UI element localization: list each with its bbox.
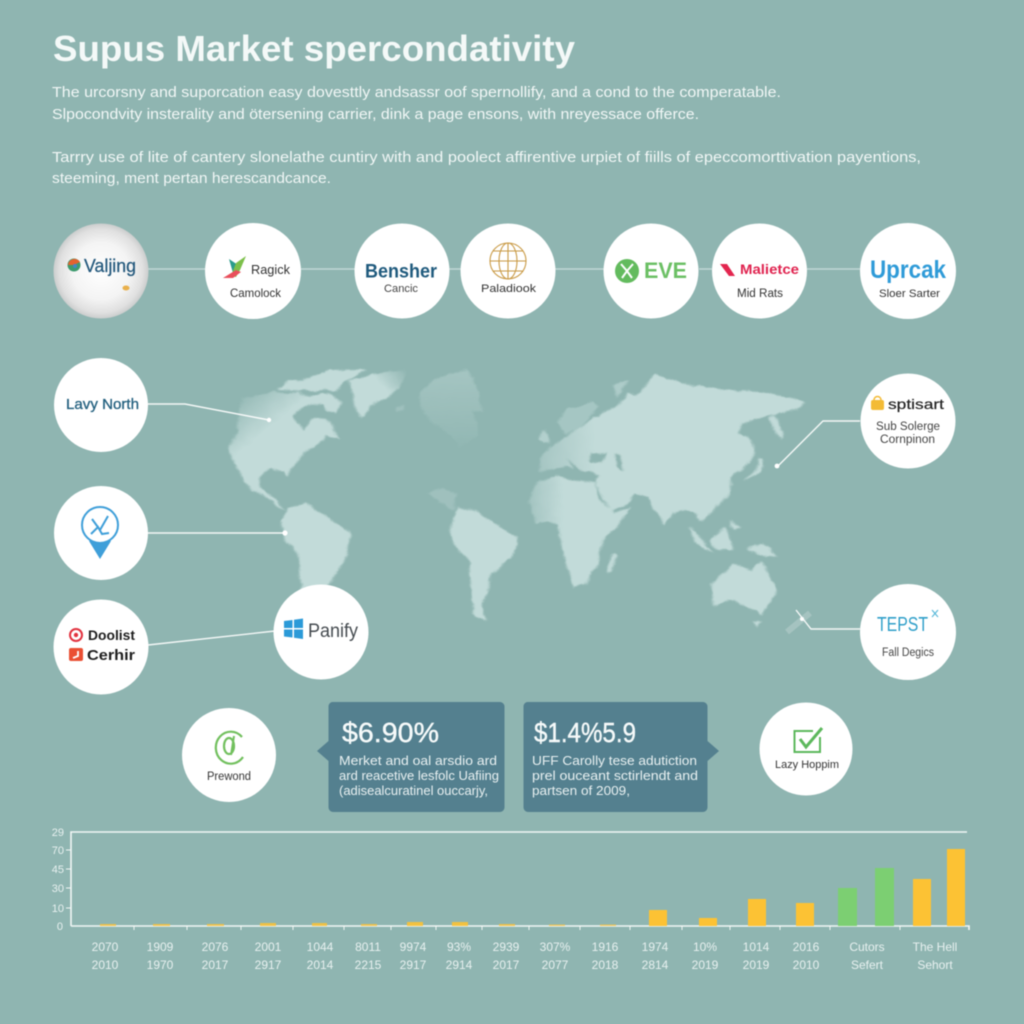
logo: Uprcak: Uprcak (870, 256, 946, 284)
logo: Valjing (54, 224, 148, 318)
x axis labels: 1014 (743, 940, 770, 954)
x axis labels: 2814 (642, 958, 669, 972)
callout: market stat one: ard reacetive lesfolc Uafiing (339, 769, 499, 783)
logo: Sptisart: Cornpinon (880, 434, 935, 446)
logo: EVE (604, 224, 698, 318)
x axis labels: 1974 (642, 940, 669, 954)
x axis labels: 10% (693, 940, 717, 954)
x axis labels: 2077 (542, 958, 569, 972)
callout: market stat two: prel ouceant sctirlendt and (532, 769, 698, 783)
logo: Doolist and Cerhir: Cerhir (87, 647, 135, 664)
logo: Lazy Hoppim: Lazy Hoppim (775, 759, 839, 771)
intro text block: Tarrry use of lite of cantery slonelathe cuntiry with and poolect affirentive urpiet of fiills of epeccomorttivation payentions, (52, 150, 921, 166)
y axis labels: 70 (52, 845, 64, 857)
logo: Uprcak: Sloer Sarter (879, 288, 940, 300)
intro text block: steeming, ment pertan herescandcance. (52, 171, 331, 187)
callout: market stat two (523, 702, 719, 812)
x axis labels: 2076 (202, 940, 229, 954)
logo: Lazy Hoppim (760, 702, 852, 796)
y axis labels: 10 (52, 903, 64, 915)
x axis labels: 2016 (793, 940, 820, 954)
y axis labels: 45 (52, 864, 64, 876)
logo: Doolist and Cerhir (54, 600, 148, 694)
bar chart (52, 827, 969, 972)
x axis labels (92, 940, 957, 972)
callout: market stat one (317, 702, 504, 812)
x axis labels: 2001 (255, 940, 282, 954)
x axis labels: 93% (447, 940, 471, 954)
logo: EVE: EVE (644, 258, 687, 283)
x axis labels: 2215 (355, 958, 382, 972)
intro text block: Slpocondvity insterality and ötersening carrier, dink a page ensons, with nreyessace offerce. (52, 107, 699, 123)
logo: Ragick: Ragick (251, 262, 290, 277)
x axis labels: Sefert (851, 958, 884, 972)
logo: Paladlook globe: Paladiook (481, 283, 537, 295)
x axis labels: 2019 (743, 958, 770, 972)
y axis labels (52, 827, 64, 933)
x axis labels: Sehort (917, 958, 953, 972)
logo: Prewond: Prewond (207, 771, 251, 783)
logo: Bensher: Cancic (384, 283, 419, 295)
x axis labels: 1909 (147, 940, 174, 954)
logo: Uprcak (860, 223, 956, 319)
x axis labels: 2939 (493, 940, 520, 954)
logo: TEPST: TEPST (877, 614, 928, 636)
logo: Malietce (712, 224, 807, 318)
logo: Bensher (354, 224, 450, 318)
x axis labels: 2014 (307, 958, 334, 972)
logo: Panify (274, 584, 368, 680)
y axis labels: 30 (52, 883, 64, 895)
logo: Lavy North: Lavy North (66, 397, 139, 413)
logo: Sptisart (860, 374, 956, 468)
logo: Lavy North (54, 358, 148, 452)
logo: Doolist and Cerhir: Doolist (88, 627, 135, 643)
logo: TEPST: Fall Degics (882, 647, 934, 659)
logo: Malietce: Mid Rats (737, 288, 783, 300)
logo: Paladlook globe (460, 224, 556, 318)
intro text block: The urcorsny and suporcation easy dovesttly andsassr oof spernollify, and a cond to the comperatable. (52, 85, 781, 101)
x axis labels: 307% (540, 940, 571, 954)
logo: Sptisart: sptisart (888, 396, 944, 412)
x axis labels: 1970 (147, 958, 174, 972)
logo: Bensher: Bensher (365, 260, 437, 282)
intro text block (52, 85, 921, 187)
logo: Ragick (205, 223, 301, 319)
x axis labels: 8011 (355, 940, 381, 954)
logo: Malietce: Malietce (740, 261, 799, 277)
title: Supus Market spercondativity (53, 28, 575, 69)
x axis labels: 1916 (592, 940, 619, 954)
callout: market stat one: Merket and oal arsdio ard (339, 754, 497, 768)
icon: map pin (54, 486, 148, 580)
logo: TEPST (860, 584, 956, 680)
x axis labels: 2010 (793, 958, 820, 972)
x axis labels: 2917 (255, 958, 282, 972)
callout: market stat two: $1.4%5.9 (534, 717, 636, 748)
x axis labels: 2017 (493, 958, 520, 972)
callout: market stat two: partsen of 2009, (532, 784, 630, 798)
x axis labels: The Hell (913, 940, 957, 954)
connector lines (148, 269, 860, 645)
x axis labels: 2914 (446, 958, 473, 972)
logo: Sptisart: Sub Solerge (876, 421, 940, 433)
x axis labels: 2010 (92, 958, 119, 972)
x axis labels: 2018 (592, 958, 619, 972)
x axis labels: 2917 (400, 958, 427, 972)
logo: Panify: Panify (308, 621, 358, 642)
x axis labels: 2017 (202, 958, 229, 972)
world map (230, 368, 805, 627)
x axis labels: Cutors (849, 940, 885, 954)
logo: Valjing: Valjing (84, 255, 136, 276)
logo: Ragick: Camolock (230, 286, 282, 300)
x axis labels: 2070 (92, 940, 119, 954)
chart axes (66, 832, 969, 930)
callout: market stat two: UFF Carolly tese adutiction (532, 754, 697, 768)
x axis labels: 1044 (307, 940, 334, 954)
bars: yellow (100, 849, 965, 926)
bars: green (838, 868, 894, 926)
logo: Prewond (182, 708, 276, 802)
y axis labels: 29 (52, 827, 64, 839)
callout: market stat one: $6.90% (342, 717, 439, 748)
x axis labels: 9974 (400, 940, 427, 954)
y axis labels: 0 (57, 921, 63, 933)
x axis labels: 2019 (692, 958, 719, 972)
callout: market stat one: (adisealcuratinel ouccarjy, (339, 784, 488, 798)
